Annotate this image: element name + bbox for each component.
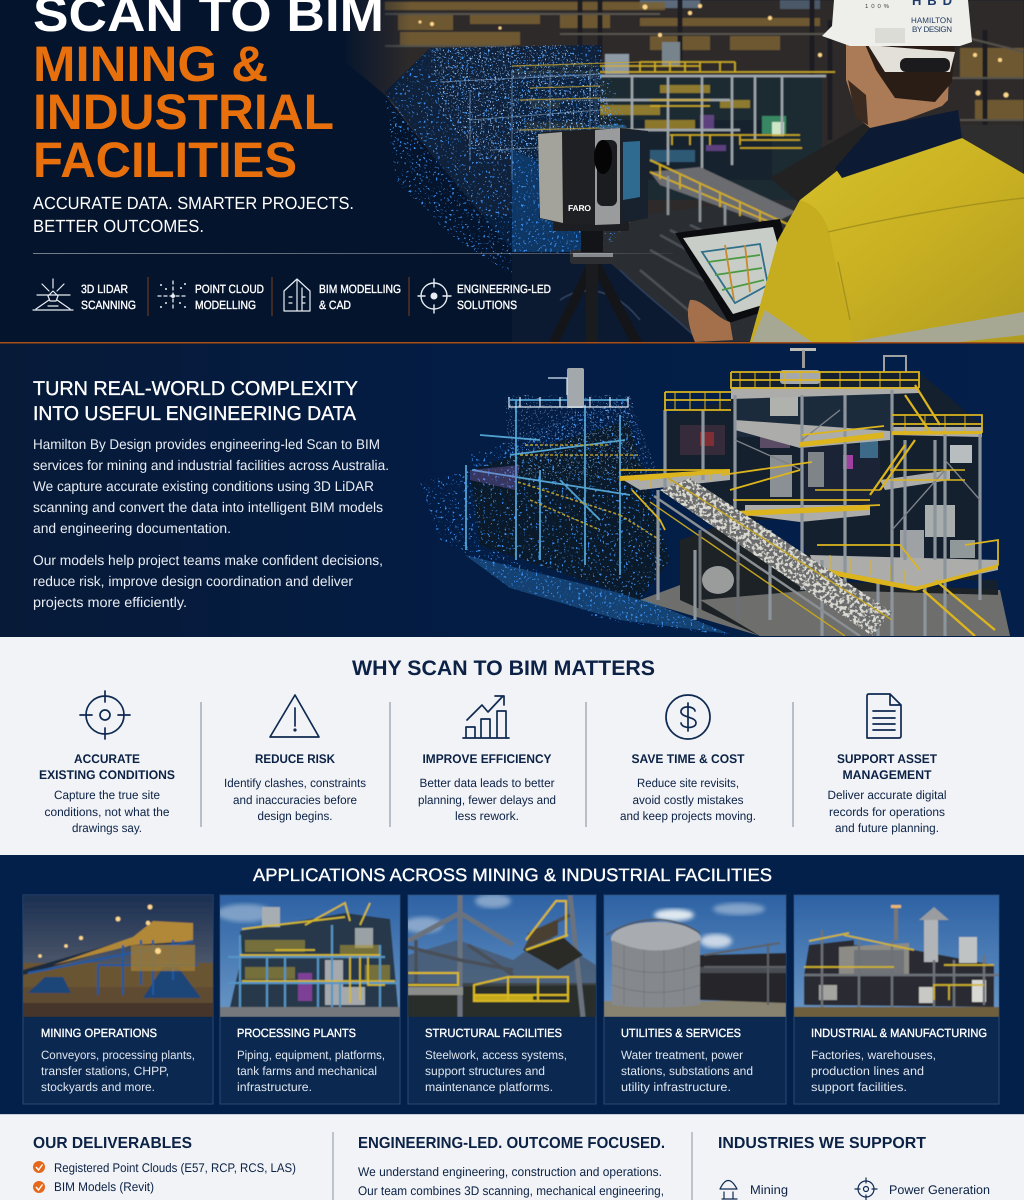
hero photo: plant at dusk	[345, 0, 1024, 342]
ground	[603, 214, 792, 342]
card: utilities and services	[604, 895, 786, 1104]
industries we support: INDUSTRIES WE SUPPORT	[718, 1135, 926, 1152]
worker in hi-vis shirt: 100%	[865, 3, 890, 10]
industries we support	[718, 1135, 990, 1200]
icon: laser scanner on tripod: FARO	[568, 203, 591, 213]
section heading: WHY SCAN TO BIM MATTERS	[352, 657, 655, 680]
benefit: accurate existing conditions: EXISTING CONDITIONS	[39, 768, 175, 782]
card: processing plants: infrastructure.	[237, 1080, 312, 1094]
tagline: ACCURATE DATA. SMARTER PROJECTS.	[33, 193, 354, 213]
worker in hi-vis shirt: HAMILTON	[911, 16, 952, 25]
photo: industrial building	[794, 895, 999, 1017]
photo: steel structure	[408, 895, 596, 1017]
engineering-led	[358, 1135, 665, 1198]
benefit: support asset management	[828, 694, 946, 835]
photo: conveyor at night	[23, 895, 213, 1017]
feature: point cloud modelling	[158, 281, 264, 312]
benefit: accurate existing conditions: Capture the true site	[54, 788, 160, 802]
panel: applications	[0, 855, 1024, 1114]
panel: footer columns	[0, 1114, 1024, 1200]
benefit: improve efficiency	[418, 696, 556, 823]
card: industrial and manufacturing: Factories, warehouses,	[811, 1048, 936, 1062]
card: industrial and manufacturing: production lines and	[811, 1064, 924, 1078]
benefit: improve efficiency: Better data leads to better	[420, 776, 554, 790]
heading	[33, 378, 358, 425]
feature: BIM modelling and CAD: & CAD	[319, 298, 351, 312]
title: INDUSTRIAL	[33, 84, 334, 140]
benefit: improve efficiency: IMPROVE EFFICIENCY	[422, 752, 552, 766]
feature: 3D LiDAR scanning: 3D LIDAR	[81, 282, 128, 296]
worker in hi-vis shirt: BY DESIGN	[912, 25, 952, 34]
solid plant	[665, 372, 998, 600]
benefit: support asset management: and future planning.	[835, 821, 939, 835]
benefit: accurate existing conditions: ACCURATE	[74, 752, 140, 766]
panel: hero	[0, 0, 1024, 342]
feature: point cloud modelling: MODELLING	[195, 298, 256, 312]
benefit: reduce risk: REDUCE RISK	[255, 752, 335, 766]
benefit: accurate existing conditions	[39, 691, 175, 835]
card: processing plants: PROCESSING PLANTS	[237, 1026, 356, 1040]
card: structural facilities: support structures and	[425, 1064, 545, 1078]
deliverables	[33, 1135, 296, 1194]
benefit: improve efficiency: planning, fewer delays and	[418, 793, 556, 807]
body text	[33, 436, 389, 610]
body text: projects more efficiently.	[33, 594, 187, 610]
tagline	[33, 196, 352, 232]
card: processing plants	[217, 895, 400, 1104]
card: mining operations	[23, 895, 213, 1104]
yellow railings	[620, 372, 998, 636]
benefit: support asset management: Deliver accurate digital	[828, 788, 946, 802]
point cloud overlay	[344, 0, 650, 272]
benefit: save time and cost	[620, 695, 756, 823]
grey decks	[620, 387, 998, 588]
card: industrial and manufacturing	[794, 895, 999, 1104]
benefit: support asset management: MANAGEMENT	[842, 768, 932, 782]
columns	[658, 390, 980, 636]
card: structural facilities: STRUCTURAL FACILITIES	[425, 1026, 562, 1040]
engineering-led: Our team combines 3D scanning, mechanical engineering,	[358, 1184, 664, 1198]
benefit: support asset management: SUPPORT ASSET	[837, 752, 937, 766]
card: industrial and manufacturing: INDUSTRIAL & MANUFACTURING	[811, 1026, 987, 1040]
coal pile	[771, 124, 870, 202]
walkway	[650, 167, 796, 225]
benefit: reduce risk	[224, 695, 366, 823]
feature: engineering-led solutions	[418, 279, 551, 313]
benefit: accurate existing conditions: conditions, not what the	[44, 805, 170, 819]
benefit: support asset management: records for operations	[829, 805, 945, 819]
deliverables: Registered Point Clouds (E57, RCP, RCS, LAS)	[54, 1161, 296, 1175]
feature: BIM modelling and CAD: BIM MODELLING	[319, 282, 401, 296]
industries we support: Power Generation	[889, 1183, 990, 1197]
heading: TURN REAL-WORLD COMPLEXITY	[33, 378, 358, 400]
card: mining operations: stockyards and more.	[41, 1080, 155, 1094]
body text: Hamilton By Design provides engineering-led Scan to BIM	[33, 436, 380, 452]
body text: and engineering documentation.	[33, 520, 231, 536]
title: FACILITIES	[33, 132, 297, 188]
title	[33, 0, 384, 188]
benefit: reduce risk: Identify clashes, constraints	[224, 776, 366, 790]
card: utilities and services: utility infrastructure.	[621, 1080, 731, 1094]
card: industrial and manufacturing: support facilities.	[811, 1080, 907, 1094]
benefit: improve efficiency: less rework.	[455, 809, 519, 823]
body text: services for mining and industrial facilities across Australia.	[33, 457, 389, 473]
card: mining operations: transfer stations, CHPP,	[41, 1064, 169, 1078]
deliverables: BIM Models (Revit)	[54, 1180, 154, 1194]
feature: point cloud modelling: POINT CLOUD	[195, 282, 264, 296]
feature: engineering-led solutions: ENGINEERING-LED	[457, 282, 551, 296]
benefit: save time and cost: SAVE TIME & COST	[632, 752, 745, 766]
icon: laser scanner on tripod	[538, 128, 648, 342]
illustration: point cloud to BIM plant	[420, 348, 1010, 636]
card: mining operations: MINING OPERATIONS	[41, 1026, 157, 1040]
body text: We capture accurate existing conditions using 3D LiDAR	[33, 478, 374, 494]
benefit: reduce risk: design begins.	[258, 809, 332, 823]
engineering-led: We understand engineering, construction and operations.	[358, 1165, 662, 1179]
panel: intro	[0, 344, 1024, 637]
dark lower left of photo	[512, 252, 700, 342]
card: utilities and services: stations, substations and	[621, 1064, 753, 1078]
card: processing plants: tank farms and mechanical	[237, 1064, 377, 1078]
benefit: reduce risk: and inaccuracies before	[233, 793, 357, 807]
feature: 3D LiDAR scanning: SCANNING	[81, 298, 136, 312]
card: structural facilities: Steelwork, access systems,	[425, 1048, 567, 1062]
benefit: save time and cost: avoid costly mistakes	[632, 793, 744, 807]
card: structural facilities	[403, 894, 596, 1104]
card: mining operations: Conveyors, processing plants,	[41, 1048, 195, 1062]
card: utilities and services: Water treatment, power	[621, 1048, 743, 1062]
body text: scanning and convert the data into intelligent BIM models	[33, 499, 383, 515]
feature: 3D LiDAR scanning	[33, 279, 136, 312]
icon: tablet with BIM model	[675, 219, 783, 342]
industries we support: Mining	[750, 1183, 788, 1197]
card: utilities and services: UTILITIES & SERVICES	[621, 1026, 741, 1040]
card: structural facilities: maintenance platforms.	[425, 1080, 553, 1094]
photo: processing plant	[220, 895, 400, 1017]
engineering-led: ENGINEERING-LED. OUTCOME FOCUSED.	[358, 1135, 665, 1152]
feature: engineering-led solutions: SOLUTIONS	[457, 298, 517, 312]
panel: why scan to BIM matters	[0, 637, 1024, 855]
photo: storage tank	[604, 895, 786, 1017]
benefit: save time and cost: and keep projects moving.	[620, 809, 756, 823]
feature: BIM modelling and CAD	[284, 279, 401, 312]
body text: reduce risk, improve design coordination and deliver	[33, 573, 353, 589]
deliverables: OUR DELIVERABLES	[33, 1135, 192, 1152]
worker in hi-vis shirt	[750, 0, 1024, 342]
mid structure	[600, 78, 822, 200]
body text: Our models help project teams make confident decisions,	[33, 552, 383, 568]
card: processing plants: Piping, equipment, platforms,	[237, 1048, 385, 1062]
heading: INTO USEFUL ENGINEERING DATA	[33, 403, 357, 425]
tagline: BETTER OUTCOMES.	[33, 216, 204, 236]
section heading: APPLICATIONS ACROSS MINING & INDUSTRIAL FACILITIES	[253, 865, 772, 885]
conveyor	[660, 478, 892, 636]
benefit: accurate existing conditions: drawings say.	[72, 821, 142, 835]
title: MINING &	[33, 36, 268, 92]
benefit: save time and cost: Reduce site revisits,	[637, 776, 739, 790]
